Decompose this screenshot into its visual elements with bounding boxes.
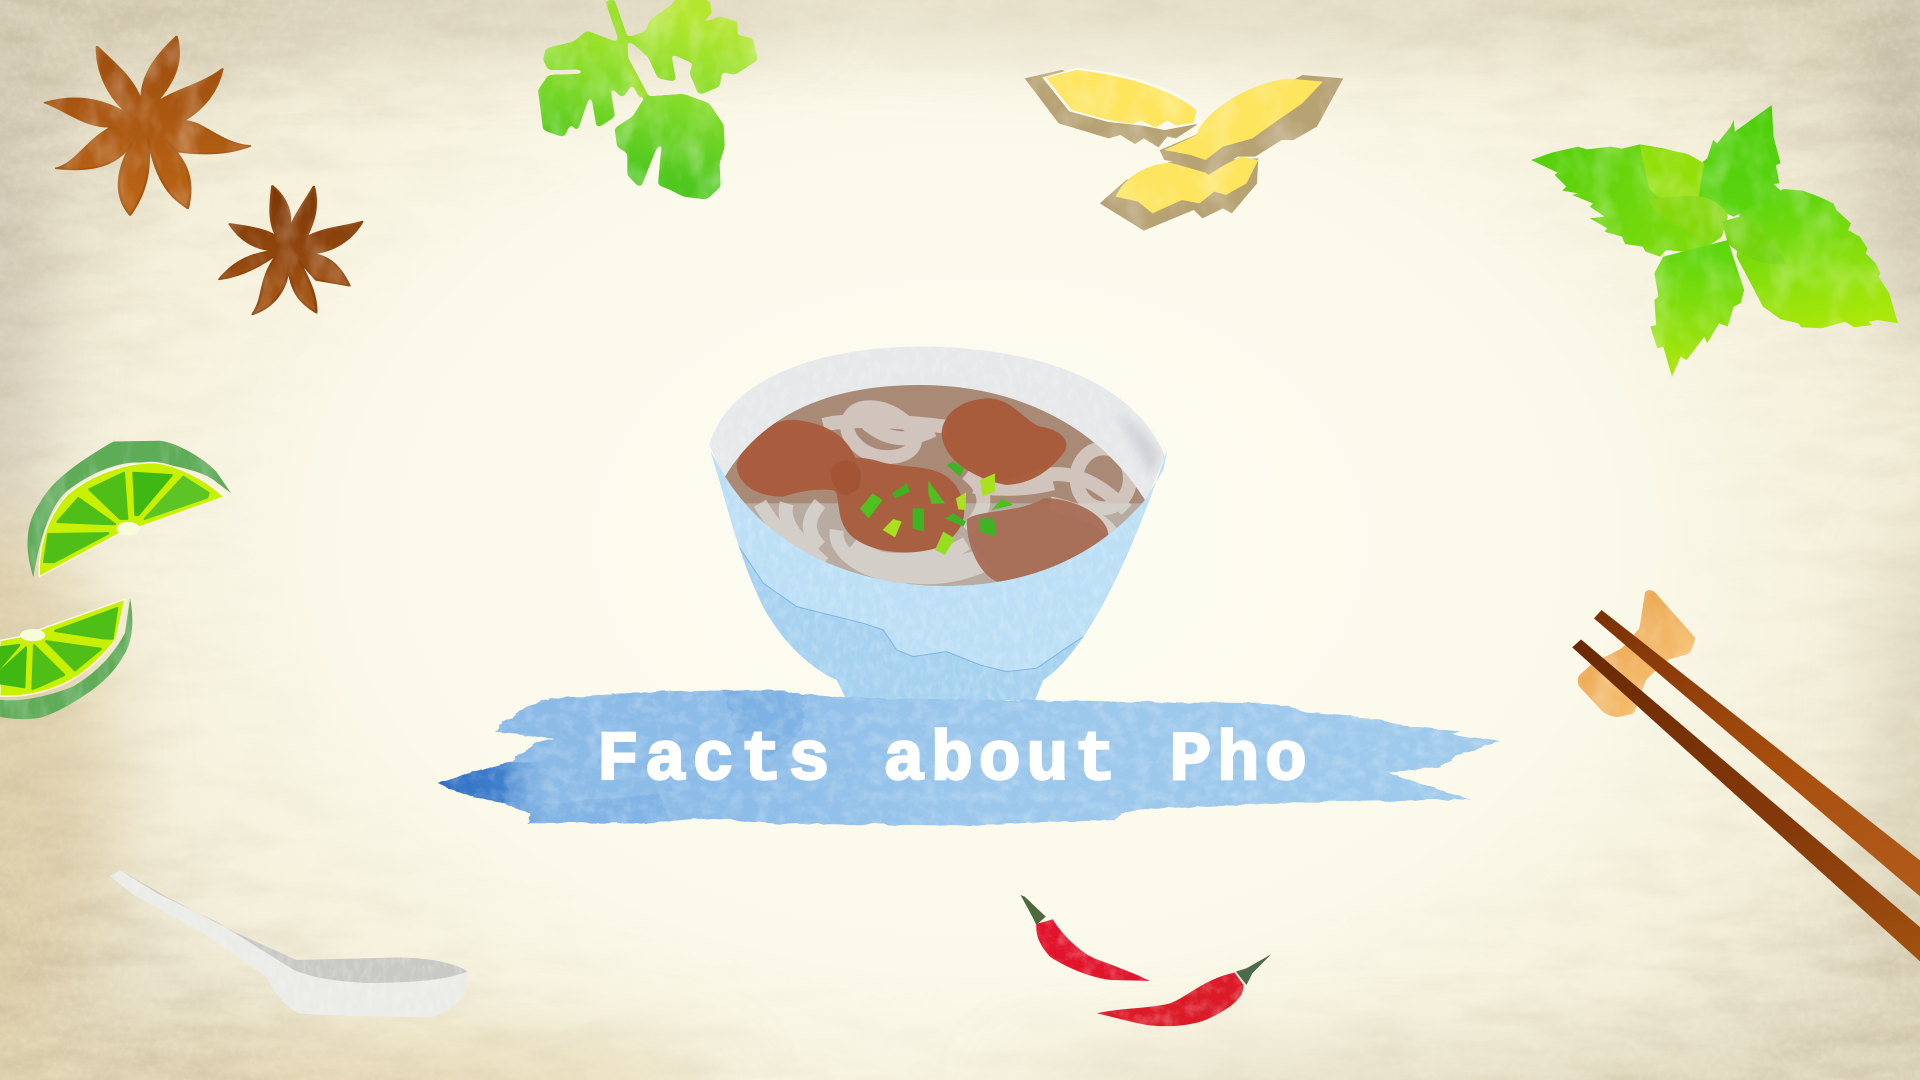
icon: cilantro sprig	[538, 0, 758, 199]
lime flesh	[39, 463, 224, 577]
broth and noodles	[725, 385, 1145, 586]
bowl of pho	[700, 347, 1180, 700]
ginger slice 2	[1160, 75, 1343, 175]
bowl inner rim	[709, 347, 1165, 503]
icon: red chili right	[1097, 954, 1271, 1026]
icon: red chili left	[1021, 895, 1150, 981]
lime rind	[0, 598, 132, 719]
icon: lime wedge bottom	[0, 598, 132, 719]
bowl body	[711, 450, 1167, 700]
icon: mint sprig	[1531, 105, 1898, 377]
rim shadow	[1113, 410, 1160, 477]
lime rind	[28, 441, 231, 577]
beef slices	[737, 398, 1108, 583]
icon: lime wedge top	[28, 441, 231, 577]
icon: chopstick rest	[1578, 590, 1695, 717]
title text: Facts about Pho	[597, 722, 1313, 801]
banner: watercolor brush stroke	[438, 689, 1500, 826]
lime flesh	[0, 599, 125, 696]
icon: large star anise	[45, 37, 250, 215]
icon: chopsticks	[1572, 610, 1920, 962]
ginger slice 1	[1025, 68, 1200, 147]
title banner	[438, 689, 1500, 826]
ginger slice 3	[1100, 157, 1258, 231]
green onion garnish	[860, 462, 1013, 555]
icon: small star anise	[219, 186, 362, 314]
bowl upper glaze with torn edge	[711, 451, 1167, 672]
icon: soup spoon	[110, 870, 468, 1017]
icon: ginger slices	[1025, 68, 1343, 231]
